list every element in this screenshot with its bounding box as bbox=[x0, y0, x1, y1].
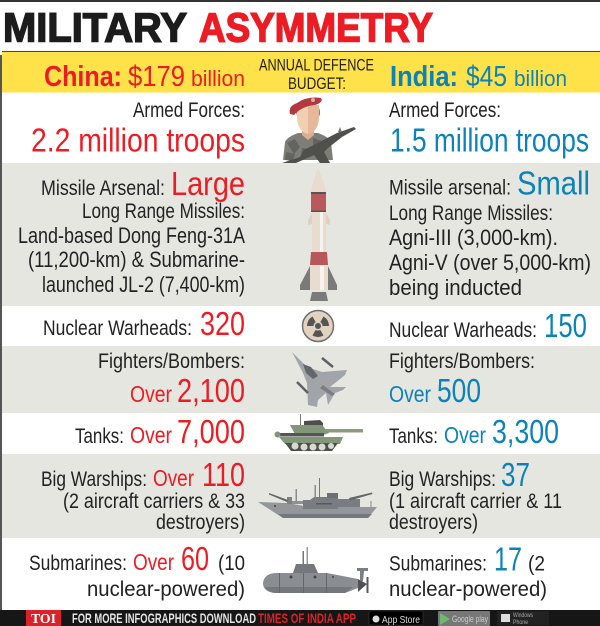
App Store badge: App Store bbox=[382, 615, 420, 626]
India warships: (1 aircraft carrier & 11 bbox=[389, 490, 562, 513]
India fighters: Over bbox=[389, 381, 431, 407]
Google play badge: Google play bbox=[452, 614, 488, 624]
budget label: BUDGET: bbox=[288, 74, 346, 93]
India tanks bbox=[389, 413, 559, 450]
India submarines: nuclear-powered) bbox=[389, 578, 547, 601]
India missiles: Missile arsenal: bbox=[389, 176, 511, 200]
India missiles: Small bbox=[517, 164, 590, 202]
India submarines: (2 bbox=[528, 552, 545, 576]
India tanks: Tanks: bbox=[389, 425, 438, 448]
China warships: 110 bbox=[202, 456, 245, 493]
footer bar bbox=[0, 610, 600, 626]
icon: missile bbox=[300, 168, 337, 301]
Windows Phone badge bbox=[497, 611, 549, 626]
App Store badge bbox=[369, 611, 423, 626]
India warheads: Nuclear Warheads: bbox=[389, 319, 537, 342]
India warheads bbox=[389, 307, 587, 344]
title: MILITARY bbox=[3, 4, 187, 50]
China submarines: (10 bbox=[218, 552, 245, 575]
footer text: TIMES OF INDIA APP bbox=[258, 610, 356, 626]
India fighters bbox=[389, 350, 535, 409]
India fighters: 500 bbox=[437, 372, 481, 409]
icon: warship bbox=[258, 478, 377, 518]
panel: fighters and bombers bbox=[98, 350, 535, 409]
India missiles: Long Range Missiles: bbox=[389, 202, 553, 225]
panel: armed forces bbox=[31, 98, 589, 163]
India troops bbox=[389, 99, 589, 158]
India budget bbox=[390, 61, 567, 93]
China missiles: Long Range Missiles: bbox=[82, 200, 245, 223]
budget label bbox=[259, 56, 374, 93]
icon: tank bbox=[274, 414, 363, 451]
China warships: Over bbox=[153, 465, 194, 491]
China missiles: Missile Arsenal: bbox=[41, 177, 165, 200]
China fighters: Fighters/Bombers: bbox=[98, 350, 245, 373]
India submarines bbox=[389, 540, 547, 601]
China fighters: Over bbox=[130, 381, 172, 407]
title bbox=[3, 4, 433, 50]
panel: big warships bbox=[41, 456, 562, 534]
India warheads: 150 bbox=[544, 307, 587, 344]
India tanks: 3,300 bbox=[492, 413, 559, 450]
India warships: 37 bbox=[501, 456, 530, 493]
panel: missile arsenal bbox=[18, 164, 591, 301]
China warheads bbox=[43, 305, 245, 342]
China tanks bbox=[75, 413, 245, 450]
China tanks: 7,000 bbox=[177, 413, 245, 450]
India missiles: Agni-III (3,000-km). bbox=[389, 225, 558, 250]
icon: fighter jet bbox=[292, 352, 347, 407]
China warships: (2 aircraft carriers & 33 bbox=[63, 490, 245, 513]
Windows Phone badge: Windows bbox=[513, 612, 534, 619]
Google play badge bbox=[438, 611, 490, 626]
China budget: billion bbox=[191, 66, 245, 91]
India submarines: 17 bbox=[494, 540, 522, 578]
China tanks: Over bbox=[130, 422, 172, 448]
panel: submarines bbox=[29, 540, 547, 601]
China tanks: Tanks: bbox=[75, 425, 124, 448]
India troops: Armed Forces: bbox=[389, 99, 501, 122]
panel: nuclear warheads bbox=[43, 305, 587, 344]
China warheads: Nuclear Warheads: bbox=[43, 317, 192, 340]
India budget: billion bbox=[514, 66, 567, 91]
icon: submarine bbox=[263, 547, 368, 593]
China warheads: 320 bbox=[200, 305, 245, 342]
India budget: India: bbox=[390, 61, 458, 93]
India budget: $45 bbox=[466, 61, 507, 93]
China submarines: Submarines: bbox=[29, 552, 127, 575]
China missiles bbox=[18, 165, 245, 297]
China fighters bbox=[98, 350, 245, 409]
India warships: destroyers) bbox=[389, 511, 478, 534]
panel: annual defence budget bbox=[2, 51, 600, 93]
China troops: 2.2 million troops bbox=[31, 122, 245, 158]
budget label: ANNUAL DEFENCE bbox=[259, 56, 374, 74]
India submarines: Submarines: bbox=[389, 552, 487, 576]
China troops: Armed Forces: bbox=[133, 99, 245, 122]
China budget: China: bbox=[44, 61, 122, 93]
TOI logo bbox=[26, 610, 61, 626]
China submarines: Over bbox=[133, 549, 174, 575]
India warships: Big Warships: bbox=[389, 468, 496, 491]
icon: radiation symbol bbox=[302, 310, 334, 342]
China budget bbox=[44, 61, 245, 93]
China budget: $179 bbox=[128, 61, 185, 93]
China warships: Big Warships: bbox=[41, 468, 147, 491]
China troops bbox=[31, 99, 245, 158]
India warships bbox=[389, 456, 562, 534]
China submarines: 60 bbox=[181, 540, 209, 577]
China warships: destroyers) bbox=[156, 511, 245, 534]
China missiles: launched JL-2 (7,400-km) bbox=[42, 272, 245, 297]
panel: tanks bbox=[75, 413, 559, 451]
title: ASYMMETRY bbox=[199, 4, 433, 50]
China fighters: 2,100 bbox=[177, 372, 245, 409]
China missiles: (11,200-km) & Submarine- bbox=[28, 247, 245, 272]
icon: soldier bbox=[282, 98, 356, 163]
India missiles: being inducted bbox=[389, 275, 522, 300]
China submarines bbox=[29, 540, 245, 601]
China missiles: Land-based Dong Feng-31A bbox=[18, 223, 245, 248]
India fighters: Fighters/Bombers: bbox=[389, 350, 535, 373]
China missiles: Large bbox=[171, 165, 245, 202]
India missiles bbox=[389, 164, 591, 300]
Windows Phone badge: Phone bbox=[513, 619, 528, 626]
China submarines: nuclear-powered) bbox=[87, 578, 245, 601]
China warships bbox=[41, 456, 245, 534]
India tanks: Over bbox=[444, 422, 486, 448]
footer text: FOR MORE INFOGRAPHICS DOWNLOAD bbox=[72, 610, 256, 626]
